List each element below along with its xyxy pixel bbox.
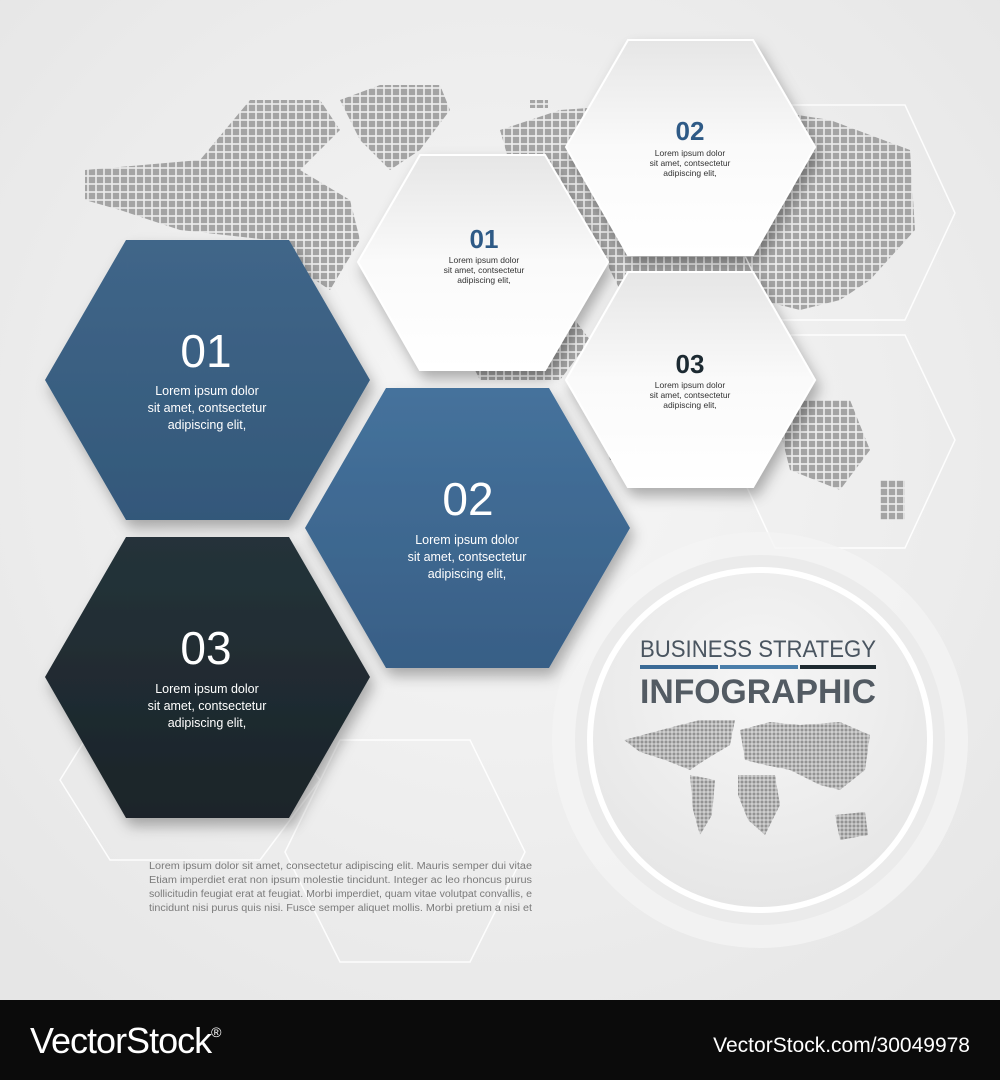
hex white 02: adipiscing elit, [663,168,717,178]
hex white 03: Lorem ipsum dolor [655,380,725,390]
hex white 02 [566,40,815,255]
hex blue 01: 01 [180,325,232,377]
footer bar: ® [211,1024,222,1040]
hex white 02: sit amet, contsectetur [650,158,731,168]
hex blue 02: Lorem ipsum dolor [415,533,519,547]
body text paragraph: tincidunt nisi purus quis nisi. Fusce semper aliquet mollis. Morbi pretium a nisi et [149,903,532,914]
hex dark 03 [45,537,370,818]
small world map [624,720,870,840]
world map dotted [85,85,915,520]
body text paragraph [149,861,532,914]
hex white 03: sit amet, contsectetur [650,390,731,400]
footer bar: VectorStock [30,1020,211,1061]
hex white 03 [566,272,815,487]
hex blue 02 [305,388,630,668]
hex blue 02: 02 [442,473,494,525]
hex white 02: 02 [676,116,704,146]
hex blue 01: adipiscing elit, [168,418,246,432]
body text paragraph: Lorem ipsum dolor sit amet, consectetur adipiscing elit. Mauris semper dui vitae [149,861,532,872]
hex blue 01 [45,240,370,520]
footer bar [0,1000,1000,1080]
hex dark 03: adipiscing elit, [168,716,246,730]
body text paragraph: sollicitudin feugiat erat at feugiat. Morbi imperdiet, quam vitae volutpat convallis, e [149,889,532,900]
hex white 01 [358,155,608,370]
hex blue 02: sit amet, contsectetur [408,550,526,564]
circle: title badge [590,570,930,910]
hex white 01: sit amet, contsectetur [444,265,525,275]
hex blue 01: Lorem ipsum dolor [155,384,259,398]
body text paragraph: Etiam imperdiet erat non ipsum molestie tincidunt. Integer ac leo rhoncus purus [149,875,532,886]
heading: business strategy: BUSINESS STRATEGY [640,636,876,663]
hex dark 03: sit amet, contsectetur [148,699,266,713]
hex white 01: 01 [470,224,498,254]
hex white 01: Lorem ipsum dolor [449,255,519,265]
hex white 03: adipiscing elit, [663,400,717,410]
hex white 01: adipiscing elit, [457,275,511,285]
hex blue 02: adipiscing elit, [428,567,506,581]
color bars [640,665,876,669]
circle outer [552,532,968,948]
hex blue 01: sit amet, contsectetur [148,401,266,415]
footer bar: VectorStock.com/30049978 [713,1034,970,1057]
faint hex outlines [60,105,955,962]
hex dark 03: Lorem ipsum dolor [155,682,259,696]
hex white 02: Lorem ipsum dolor [655,148,725,158]
hex white 03: 03 [676,349,704,379]
heading: infographic: INFOGRAPHIC [640,673,876,711]
hex dark 03: 03 [180,622,232,674]
